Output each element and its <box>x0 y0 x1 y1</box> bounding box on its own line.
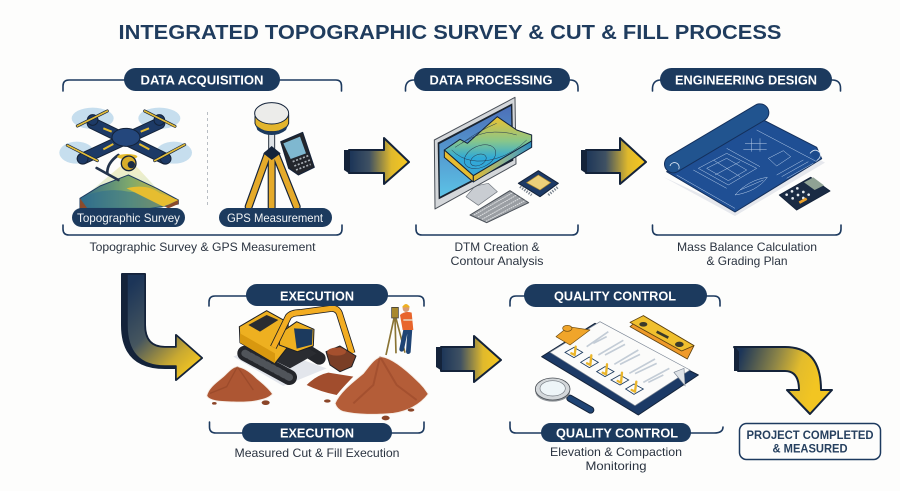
heading pill top <box>246 284 388 306</box>
icon: soil piles <box>207 357 428 420</box>
heading pill: DATA ACQUISITION <box>140 74 264 88</box>
icon: magnifying glass <box>535 378 591 410</box>
callout: project completed: & MEASURED <box>772 444 848 456</box>
heading pill bottom: QUALITY CONTROL <box>556 426 678 440</box>
caption: Monitoring <box>586 459 646 473</box>
bracket top <box>63 80 342 91</box>
caption: Elevation & Compaction <box>550 445 682 459</box>
heading pill bottom <box>242 423 392 442</box>
panel: execution <box>207 284 428 460</box>
arrow: execution to quality control <box>436 336 501 382</box>
bracket bottom <box>210 422 424 433</box>
heading pill: ENGINEERING DESIGN <box>675 74 817 88</box>
callout: project completed: PROJECT COMPLETED <box>746 430 874 442</box>
bracket bottom <box>652 225 841 235</box>
panel: quality control <box>510 284 723 473</box>
bracket top <box>209 296 424 306</box>
title: INTEGRATED TOPOGRAPHIC SURVEY & CUT & FILL PROCESS <box>118 22 782 44</box>
caption: Topographic Survey & GPS Measurement <box>90 240 316 254</box>
heading pill <box>660 68 832 91</box>
heading pill <box>124 68 280 91</box>
heading pill: DATA PROCESSING <box>430 74 552 88</box>
sub-label: GPS measurement <box>219 208 332 227</box>
icon: clipboard checklist <box>542 322 698 415</box>
icon: spirit level <box>630 316 694 359</box>
heading pill bottom <box>541 423 691 442</box>
caption <box>550 445 682 473</box>
callout: project completed <box>740 424 880 460</box>
icon: GPS receiver on tripod <box>249 103 314 207</box>
sub-label: topographic survey: Topographic Survey <box>77 211 180 225</box>
caption: DTM Creation & <box>454 240 540 254</box>
icon: monitor with contour surface, chip and keyboard <box>434 97 558 223</box>
heading pill bottom: EXECUTION <box>280 426 354 440</box>
bracket bottom <box>416 225 578 235</box>
sub-label: GPS measurement: GPS Measurement <box>227 211 324 225</box>
icon: drone over terrain <box>59 108 192 208</box>
divider <box>206 112 208 208</box>
bracket bottom <box>63 225 342 235</box>
arrow: processing to design <box>581 138 646 184</box>
panel: data acquisition <box>59 68 342 254</box>
icon: surveyor with total station <box>386 304 413 355</box>
arrow: quality control to completion <box>734 347 832 414</box>
heading pill <box>414 68 570 91</box>
bracket top <box>510 296 720 306</box>
heading pill top: QUALITY CONTROL <box>554 290 676 304</box>
icon: blueprint roll <box>663 113 830 216</box>
bracket top <box>406 80 578 91</box>
heading pill top: EXECUTION <box>280 290 354 304</box>
bracket top <box>652 80 840 91</box>
panel: engineering design <box>652 68 841 268</box>
caption: Measured Cut & Fill Execution <box>234 446 400 460</box>
arrow: design down to execution <box>122 274 202 380</box>
caption: Contour Analysis <box>450 254 544 268</box>
caption: & Grading Plan <box>706 254 788 268</box>
panel: data processing <box>406 68 578 268</box>
arrow: acquisition to processing <box>344 138 409 184</box>
heading pill top <box>524 284 707 307</box>
bracket bottom <box>510 422 723 433</box>
icon: excavator <box>233 308 356 386</box>
caption: Mass Balance Calculation <box>677 240 817 254</box>
caption <box>677 240 817 268</box>
sub-label: topographic survey <box>72 208 185 227</box>
caption <box>450 240 544 268</box>
